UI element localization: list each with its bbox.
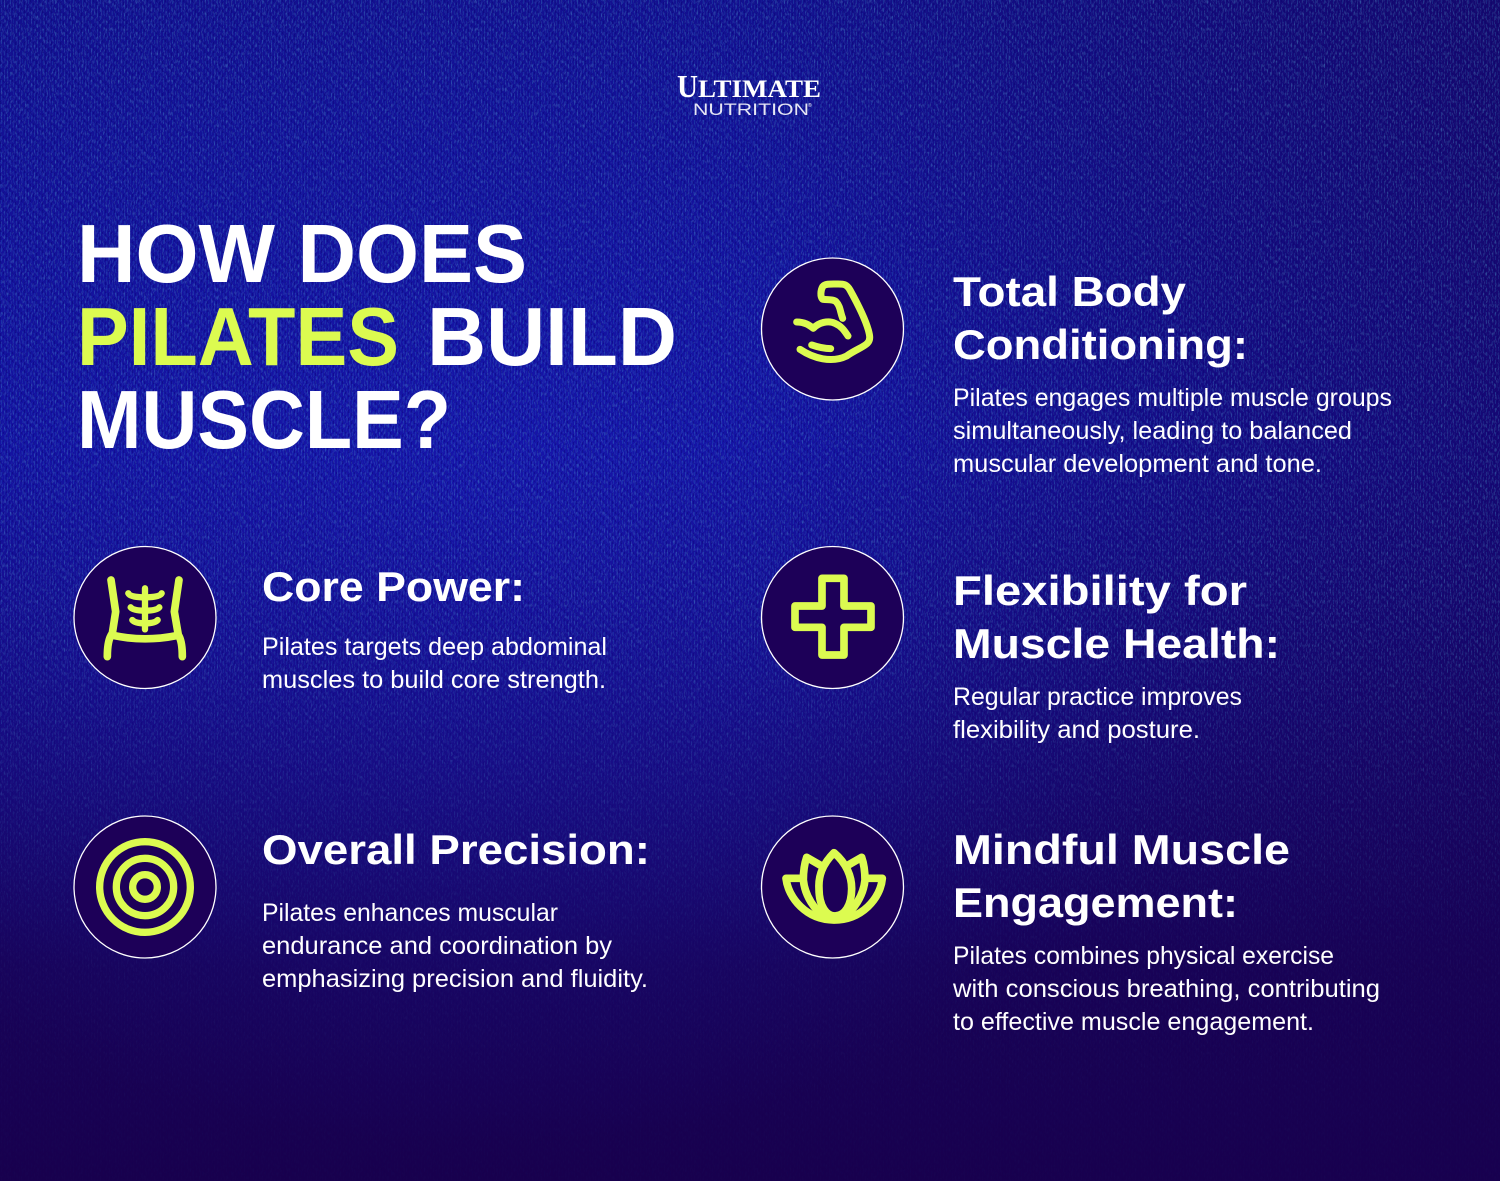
icon: target rings: [74, 816, 216, 958]
icon: plus cross: [762, 546, 904, 688]
title: PILATES: [77, 290, 399, 383]
heading: Muscle Health:: [953, 620, 1280, 667]
logo: Ultimate Nutrition: LTIMATE: [698, 76, 821, 103]
panel: total body conditioning: [762, 258, 1392, 478]
logo: Ultimate Nutrition: U: [677, 68, 698, 104]
text block: Pilates targets deep abdominal: [262, 633, 607, 661]
icon: flexed arm: [762, 258, 904, 400]
panel: core power: [74, 546, 607, 694]
text block: Pilates enhances muscular: [262, 899, 558, 927]
text block: [262, 899, 648, 993]
panel: flexibility for muscle health: [762, 546, 1280, 744]
logo: Ultimate Nutrition: [677, 68, 821, 119]
heading: [953, 826, 1290, 926]
heading: Engagement:: [953, 879, 1238, 926]
text block: with conscious breathing, contributing: [952, 975, 1380, 1003]
title: [77, 207, 677, 466]
heading: Mindful Muscle: [953, 826, 1290, 873]
text block: [953, 683, 1242, 744]
heading: Core Power:: [262, 563, 525, 610]
text block: muscular development and tone.: [953, 450, 1322, 478]
text block: muscles to build core strength.: [262, 666, 606, 694]
text block: Regular practice improves: [953, 683, 1242, 711]
text block: [953, 384, 1392, 478]
text block: emphasizing precision and fluidity.: [262, 965, 648, 993]
logo: Ultimate Nutrition: ®: [808, 102, 812, 109]
heading: Overall Precision:: [262, 826, 650, 873]
panel: mindful muscle engagement: [762, 816, 1380, 1036]
text block: to effective muscle engagement.: [953, 1008, 1314, 1036]
text block: Pilates engages multiple muscle groups: [953, 384, 1392, 412]
text block: endurance and coordination by: [262, 932, 613, 960]
text block: [262, 633, 607, 694]
text block: simultaneously, leading to balanced: [953, 417, 1352, 445]
heading: [953, 268, 1248, 368]
text block: Pilates combines physical exercise: [953, 942, 1334, 970]
text block: [952, 942, 1380, 1036]
logo: Ultimate Nutrition: NUTRITION: [693, 100, 809, 119]
heading: Conditioning:: [953, 321, 1248, 368]
title: BUILD: [427, 290, 677, 383]
icon: abdomen: [74, 546, 216, 688]
heading: Total Body: [953, 268, 1187, 315]
title: HOW DOES: [77, 207, 527, 300]
title: MUSCLE?: [77, 373, 451, 466]
text block: flexibility and posture.: [953, 716, 1200, 744]
heading: [953, 567, 1280, 667]
icon: lotus: [762, 816, 904, 958]
heading: Flexibility for: [953, 567, 1247, 614]
panel: overall precision: [74, 816, 650, 993]
